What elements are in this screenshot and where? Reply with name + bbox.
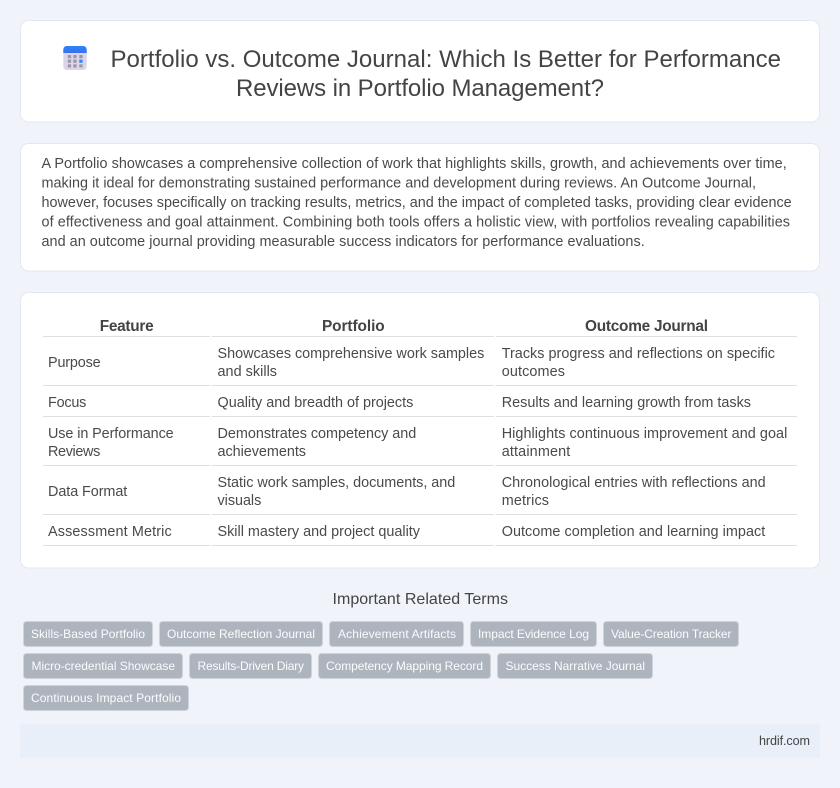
text block: description: A Portfolio showcases a comprehensive collection of work that highlights skills, growth, and achievements over time, [42,156,787,172]
tag: competency mapping record: Competency Mapping Record [326,659,483,673]
tag: outcome reflection journal: Outcome Reflection Journal [167,627,315,641]
table header row: Portfolio [322,318,385,335]
tag: impact evidence log: Impact Evidence Log [478,627,589,641]
tag: success narrative journal: Success Narrative Journal [506,659,645,673]
panel: description [20,144,820,271]
table row: focus [43,395,797,417]
table row: assessment metric: Skill mastery and project quality [218,524,421,540]
table row: focus: Quality and breadth of projects [218,395,413,411]
text block: description [42,156,792,250]
icon: calendar [63,46,87,70]
panel: comparison table [20,292,820,568]
tag: competency mapping record [318,654,490,678]
tag: results-driven diary: Results-Driven Diary [198,659,304,673]
tag: continuous impact portfolio: Continuous Impact Portfolio [31,691,181,705]
tag: value-creation tracker [604,622,738,646]
table header row [43,318,797,337]
text block: description: of effectiveness and goal attainment. Combining both tools offers a holistic view, with portfolios revealing capabilities [42,214,790,230]
tag: achievement artifacts [330,622,464,646]
tag: micro-credential showcase [24,654,182,678]
footer [20,724,820,758]
table header row: Feature [100,318,154,335]
text block: description: making it ideal for demonstrating sustained performance and development during reviews. An Outcome Journal, [42,176,756,192]
table row: purpose: Showcases comprehensive work samples [218,346,484,362]
table row: focus: Focus [48,395,86,411]
title: Portfolio vs. Outcome Journal: Which Is Better for Performance [110,46,781,73]
tag: value-creation tracker: Value-Creation Tracker [611,627,732,641]
table row: use in performance reviews: Demonstrates competency and [218,426,416,442]
table row: use in performance reviews: achievements [218,444,306,460]
table row: data format: visuals [218,493,261,509]
table row: assessment metric: Assessment Metric [48,524,172,540]
tag: success narrative journal [498,654,652,678]
table row: use in performance reviews: Highlights continuous improvement and goal [502,426,787,442]
table row: use in performance reviews: Reviews [48,444,100,460]
table row: data format: Chronological entries with reflections and [502,475,766,491]
table row: purpose: Purpose [48,355,101,371]
text block: description: however, focuses specifically on tracking results, metrics, and the impact of completed tasks, providing clear evidence [42,195,792,211]
table row: use in performance reviews: attainment [502,444,570,460]
tag: skills-based portfolio [24,622,152,646]
table row: purpose: Tracks progress and reflections on specific [502,346,775,362]
tag: continuous impact portfolio [24,686,188,710]
table row: assessment metric [43,524,797,546]
panel: header [20,20,820,122]
text block: description: and an outcome journal providing measurable success indicators for performance evaluations. [42,234,645,250]
title [110,46,781,102]
related term tags [24,622,738,710]
table header row: Outcome Journal [585,318,708,335]
table row: assessment metric: Outcome completion and learning impact [502,524,765,540]
heading: important related terms: Important Related Terms [332,591,508,608]
tag: outcome reflection journal [160,622,322,646]
tag: micro-credential showcase: Micro-credential Showcase [32,659,175,673]
footer: hrdif.com [759,734,810,748]
table row: purpose [43,346,797,386]
title: Reviews in Portfolio Management? [236,75,604,102]
tag: results-driven diary [190,654,312,678]
tag: skills-based portfolio: Skills-Based Portfolio [31,627,145,641]
table row: data format: Static work samples, documents, and [218,475,455,491]
table row: use in performance reviews: Use in Performance [48,426,174,442]
tag: impact evidence log [470,622,596,646]
table row: purpose: outcomes [502,364,565,380]
table row: use in performance reviews [43,426,797,466]
tag: achievement artifacts: Achievement Artifacts [338,627,456,641]
table row: data format [43,475,797,515]
table row: focus: Results and learning growth from tasks [502,395,751,411]
table row: data format: metrics [502,493,549,509]
table row: data format: Data Format [48,484,127,500]
table row: purpose: and skills [218,364,277,380]
